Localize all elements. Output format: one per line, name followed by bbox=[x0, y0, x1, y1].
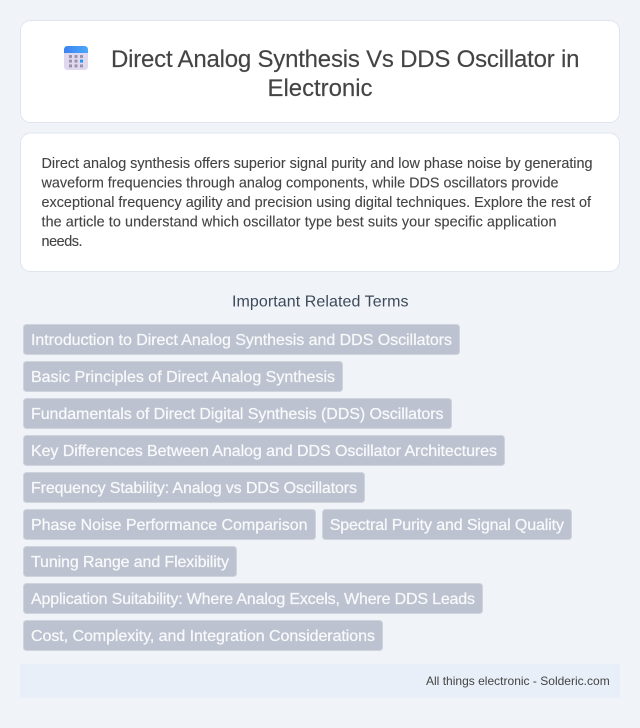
tag 8: Tuning Range and Flexibility bbox=[31, 554, 229, 571]
tag 4 bbox=[24, 436, 504, 466]
tag 7: Spectral Purity and Signal Quality bbox=[330, 517, 564, 534]
tag 6: Phase Noise Performance Comparison bbox=[31, 517, 308, 534]
heading: important related terms: Important Related Terms bbox=[232, 294, 408, 310]
panel: summary bbox=[20, 133, 620, 272]
title bbox=[111, 46, 580, 102]
text block: summary paragraph bbox=[40, 156, 592, 250]
text block: summary paragraph: needs. bbox=[42, 234, 82, 250]
tag 9: Application Suitability: Where Analog Excels, Where DDS Leads bbox=[31, 591, 475, 608]
footer bbox=[20, 664, 620, 698]
tag 5 bbox=[24, 472, 364, 502]
tag 1 bbox=[24, 324, 460, 354]
tag 9 bbox=[24, 584, 482, 614]
tag 2: Basic Principles of Direct Analog Synthesis bbox=[31, 369, 335, 386]
tag 2 bbox=[24, 362, 342, 392]
tag 1: Introduction to Direct Analog Synthesis and DDS Oscillators bbox=[31, 332, 452, 349]
panel: title card bbox=[20, 20, 620, 122]
text block: summary paragraph: Direct analog synthesis offers superior signal purity and low phase noise by generating bbox=[42, 156, 592, 172]
tag 5: Frequency Stability: Analog vs DDS Oscillators bbox=[31, 480, 357, 497]
panel: related terms tags bbox=[24, 324, 572, 650]
tag 7 bbox=[322, 510, 572, 540]
title: Direct Analog Synthesis Vs DDS Oscillator in bbox=[111, 46, 580, 73]
tag 3 bbox=[24, 398, 452, 428]
tag 10 bbox=[24, 620, 382, 650]
tag 4: Key Differences Between Analog and DDS Oscillator Architectures bbox=[31, 443, 497, 460]
text block: summary paragraph: the article to understand which oscillator type best suits your specific application bbox=[42, 214, 556, 230]
tag 6 bbox=[24, 510, 316, 540]
title: Electronic bbox=[268, 75, 372, 102]
icon: calendar bbox=[64, 46, 88, 70]
text block: summary paragraph: waveform frequencies through analog components, while DDS oscillators provide bbox=[40, 176, 558, 192]
tag 10: Cost, Complexity, and Integration Considerations bbox=[31, 628, 375, 645]
footer: All things electronic - Solderic.com bbox=[426, 674, 610, 688]
tag 8 bbox=[24, 546, 236, 576]
text block: summary paragraph: exceptional frequency agility and precision using digital techniques. Explore the rest of bbox=[42, 195, 592, 211]
tag 3: Fundamentals of Direct Digital Synthesis (DDS) Oscillators bbox=[31, 406, 444, 423]
